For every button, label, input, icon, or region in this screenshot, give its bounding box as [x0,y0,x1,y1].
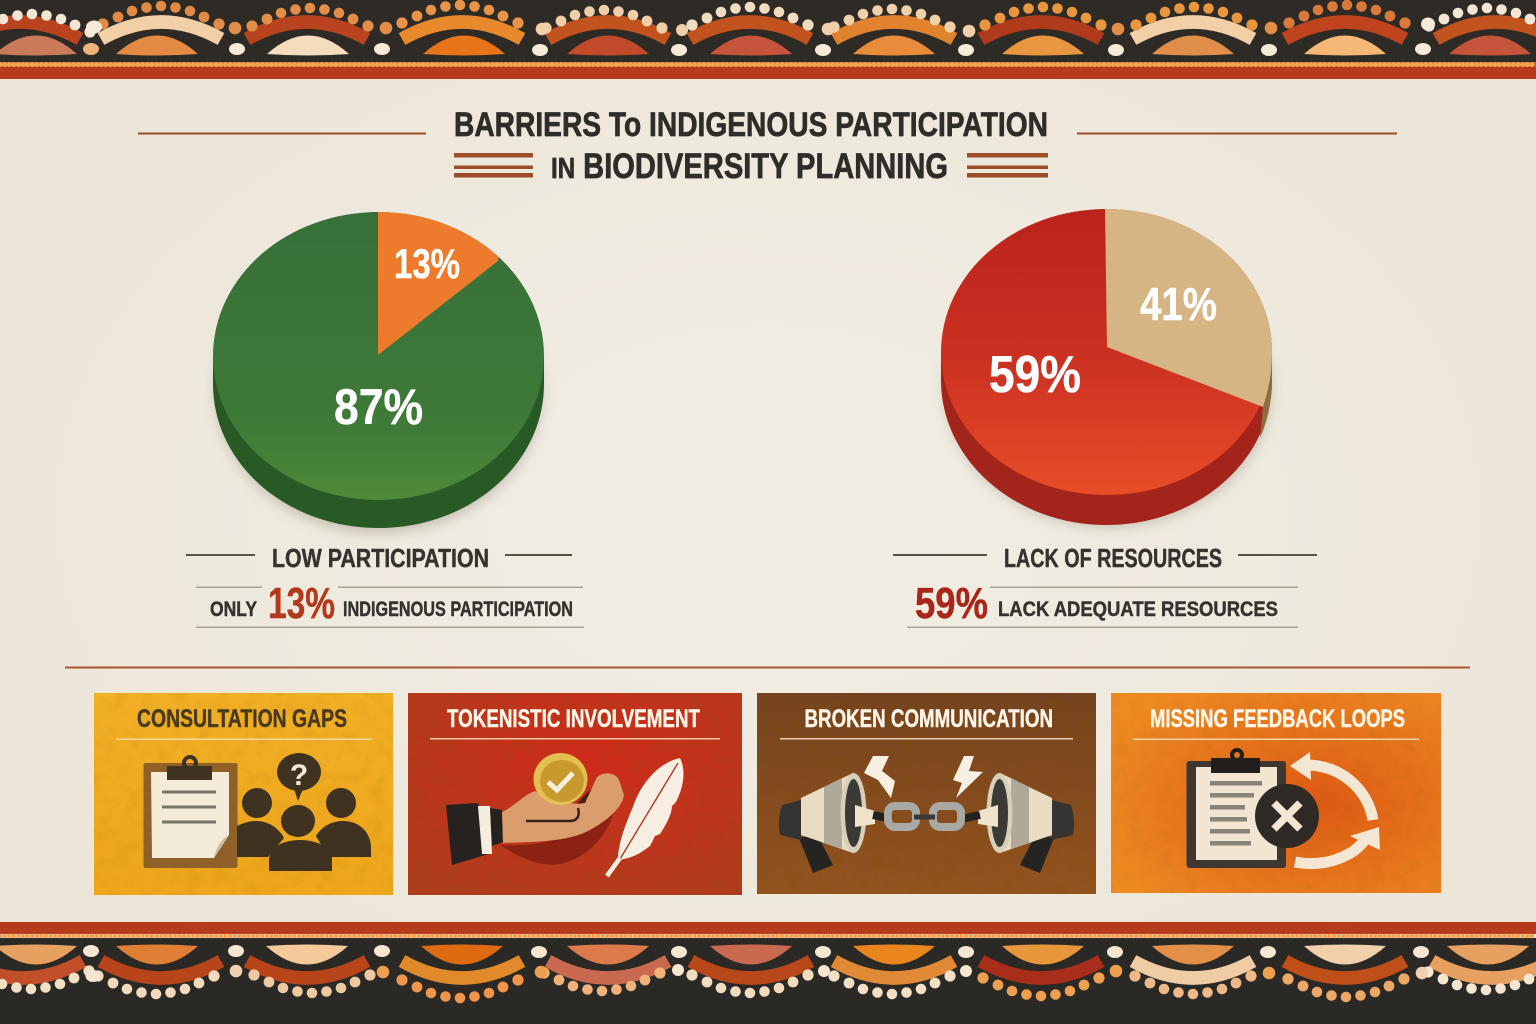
label: low participation: INDIGENOUS PARTICIPATION [343,598,573,621]
icon: left megaphone [779,773,875,873]
coin [534,753,588,805]
41% slice [1105,209,1272,407]
title: IN BIODIVERSITY PLANNING [551,147,948,186]
title: BARRIERS To INDIGENOUS PARTICIPATION [454,106,1048,144]
icon: feather [607,758,683,876]
label: lack of resources [893,543,1317,628]
panel: tokenistic involvement [408,693,742,895]
icon: hand holding coin [446,753,624,865]
59% value: 59% [989,346,1081,404]
icon: group of people with question: ? [290,759,308,792]
41% value: 41% [1140,278,1217,330]
13% value: 13% [394,240,460,287]
label: low participation: 13% [268,579,335,628]
icon: x mark [1255,784,1319,848]
icon: group of people with question [237,753,371,871]
title [454,106,1048,186]
icon: clipboard [1186,750,1286,868]
icon: clipboard [144,757,238,868]
icon: right megaphone [978,773,1074,873]
label: lack of resources: LACK OF RESOURCES [1004,543,1222,573]
label: low participation [186,543,584,628]
label: lack of resources: LACK ADEQUATE RESOURCES [998,598,1278,621]
pie chart: low participation [213,212,544,532]
label: lack of resources: 59% [915,579,988,628]
heading: BROKEN COMMUNICATION [804,705,1053,733]
pie chart: lack of resources [941,209,1272,526]
heading: CONSULTATION GAPS [137,705,347,733]
title rules and stripes [138,132,1397,178]
panel: broken communication [757,693,1096,894]
panel: missing feedback loops [1111,693,1441,893]
label: low participation: LOW PARTICIPATION [272,543,489,573]
label: low participation: ONLY [210,598,257,621]
icon: chain [873,806,980,827]
icon: loop arrows [1290,752,1380,864]
panel: consultation gaps [94,693,393,895]
bottom decorative border [0,922,1536,1024]
heading: TOKENISTIC INVOLVEMENT [447,705,700,733]
heading: MISSING FEEDBACK LOOPS [1150,705,1405,733]
icon: lightning bolts [864,756,983,798]
top decorative border [0,0,1536,79]
13% slice [378,212,498,355]
87% value: 87% [334,379,423,435]
